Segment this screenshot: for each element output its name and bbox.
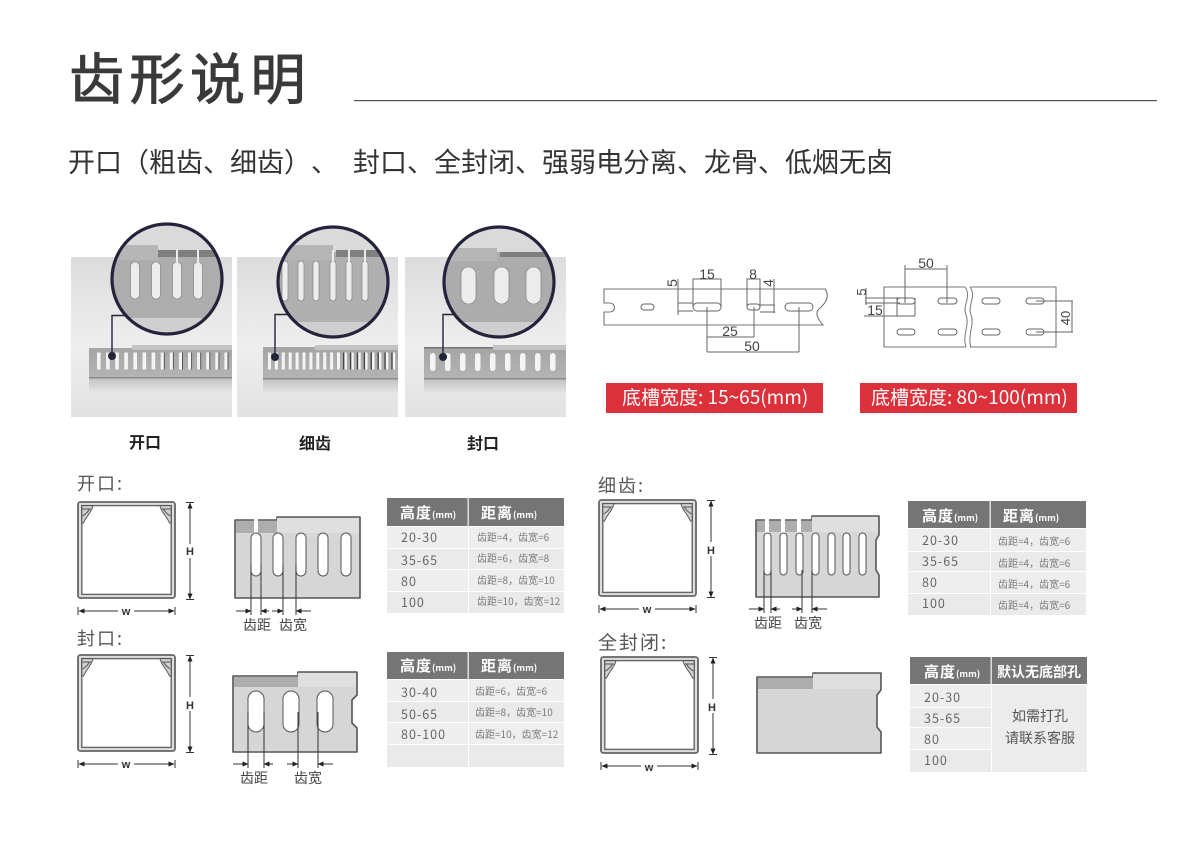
panel: fine tooth photo — [237, 225, 398, 417]
table: fully closed: 高度 — [924, 661, 956, 682]
drawing: 15~65 dimension drawing: 4 — [760, 279, 776, 287]
drawing: 15~65 dimension drawing — [604, 266, 827, 354]
cross-section: fully closed: w — [644, 762, 654, 774]
table: fine: 20-30 — [922, 530, 959, 549]
table: open: 100 — [401, 592, 425, 611]
table: fully closed — [910, 657, 1087, 772]
tooth drawing: open — [235, 517, 360, 635]
table: fine: 100 — [922, 593, 946, 612]
tooth drawing: fine — [749, 516, 879, 633]
table: closed: 50-65 — [401, 704, 438, 723]
table: closed — [387, 652, 564, 767]
tooth drawing: closed — [233, 672, 357, 788]
table: closed: 齿距=6，齿宽=6 — [475, 683, 548, 698]
cross-section: closed — [78, 655, 194, 771]
table: open: 高度 — [400, 502, 432, 523]
table: open — [387, 498, 564, 613]
tooth drawing: open: 齿距 — [243, 615, 271, 635]
table: closed: 高度 — [400, 655, 432, 676]
cross-section: fully closed — [601, 657, 717, 774]
table: fully closed: 80 — [924, 729, 940, 748]
table: closed: 齿距=8，齿宽=10 — [475, 704, 553, 719]
drawing: 15~65 dimension drawing: 5 — [664, 279, 680, 287]
cross-section: fine: w — [642, 604, 652, 616]
table: open: 齿距=6，齿宽=8 — [477, 550, 550, 565]
table: fine: (mm) — [954, 511, 978, 524]
tooth drawing: open: 齿宽 — [279, 615, 307, 635]
table: fully closed: 20-30 — [924, 687, 961, 706]
table: fully closed: 100 — [924, 750, 948, 769]
table: open: (mm) — [513, 508, 537, 521]
leader — [112, 316, 124, 356]
drawing: 15~65 dimension drawing: 50 — [744, 338, 760, 354]
caption: fine: 细齿 — [299, 430, 331, 454]
caption: closed: 封口 — [467, 430, 499, 454]
table: open: 35-65 — [401, 550, 438, 569]
table: fine — [908, 501, 1086, 615]
tooth drawing: fine: 齿距 — [754, 613, 782, 633]
table: open: (mm) — [432, 508, 456, 521]
table: closed: 齿距=10，齿宽=12 — [475, 726, 559, 741]
cross-section: open — [78, 502, 194, 618]
table: fine: (mm) — [1035, 511, 1059, 524]
tooth drawing: closed: 齿宽 — [294, 768, 322, 788]
caption: open: 开口 — [129, 429, 161, 453]
drawing: 80~100 dimension drawing: 5 — [854, 288, 869, 296]
strip — [89, 345, 232, 378]
table: closed: (mm) — [513, 661, 537, 674]
tooth drawing: closed: 齿距 — [240, 768, 268, 788]
drawing: 80~100 dimension drawing — [854, 255, 1073, 347]
table: fine: 高度 — [922, 505, 954, 526]
table: fully closed: (mm) — [956, 667, 980, 680]
panel: closed tooth photo — [405, 225, 566, 417]
drawing: 80~100 dimension drawing: 15 — [867, 302, 883, 318]
magnifier — [114, 226, 220, 332]
table: fine: 齿距=4，齿宽=6 — [998, 597, 1071, 612]
drawing: 15~65 dimension drawing: 8 — [749, 266, 757, 282]
tooth drawing: fine: 齿宽 — [794, 613, 822, 633]
drawing: 80~100 dimension drawing: 40 — [1058, 311, 1073, 325]
table: open: 齿距=4，齿宽=6 — [477, 529, 550, 544]
table: open: 20-30 — [401, 527, 438, 546]
heading: fine: 细齿: — [598, 472, 645, 498]
table: open: 齿距=10，齿宽=12 — [477, 593, 561, 608]
table: closed: 80-100 — [401, 724, 446, 743]
table: closed: 30-40 — [401, 682, 438, 701]
red label: 15~65: 底槽宽度: 15~65(mm) — [622, 383, 808, 410]
subtitle: 封口、全封闭、强弱电分离、龙骨、低烟无卤 — [353, 141, 893, 180]
cross-section: closed: w — [121, 759, 131, 771]
cross-section: fine — [599, 500, 715, 616]
table: closed: 距离 — [481, 655, 513, 676]
table: fine: 齿距=4，齿宽=6 — [998, 533, 1071, 548]
table: fully closed: 默认无底部孔 — [997, 662, 1081, 682]
table: closed: (mm) — [432, 661, 456, 674]
drawing: 15~65 dimension drawing: 15 — [699, 266, 715, 282]
heading: open: 开口: — [77, 470, 124, 496]
table: fine: 齿距=4，齿宽=6 — [998, 576, 1071, 591]
heading: fully closed: 全封闭: — [598, 628, 668, 655]
heading: closed: 封口: — [77, 625, 124, 651]
cross-section: closed: H — [186, 700, 194, 712]
table: fully closed: 35-65 — [924, 708, 961, 727]
cross-section: open: H — [186, 546, 194, 558]
cross-section: open: w — [121, 606, 131, 618]
table: open: 80 — [401, 571, 417, 590]
red label: 80~100: 底槽宽度: 80~100(mm) — [871, 383, 1068, 410]
table: fully closed: 请联系客服 — [1005, 728, 1075, 748]
panel: open tooth photo — [71, 222, 232, 417]
cross-section: fully closed: H — [708, 702, 716, 714]
table: open: 齿距=8，齿宽=10 — [477, 572, 555, 587]
cross-section: fine: H — [707, 545, 715, 557]
table: fine: 齿距=4，齿宽=6 — [998, 555, 1071, 570]
table: fine: 距离 — [1003, 505, 1035, 526]
title rule — [354, 100, 1157, 101]
table: fine: 80 — [922, 572, 938, 591]
table: fine: 35-65 — [922, 551, 959, 570]
tooth drawing: fully closed — [757, 673, 881, 753]
drawing: 80~100 dimension drawing: 50 — [918, 255, 934, 271]
subtitle: 开口（粗齿、细齿）、 — [68, 141, 338, 180]
table: open: 距离 — [481, 502, 513, 523]
table: fully closed: 如需打孔 — [1012, 706, 1068, 726]
title: 齿形说明 — [69, 35, 311, 115]
drawing: 15~65 dimension drawing: 25 — [722, 323, 738, 339]
